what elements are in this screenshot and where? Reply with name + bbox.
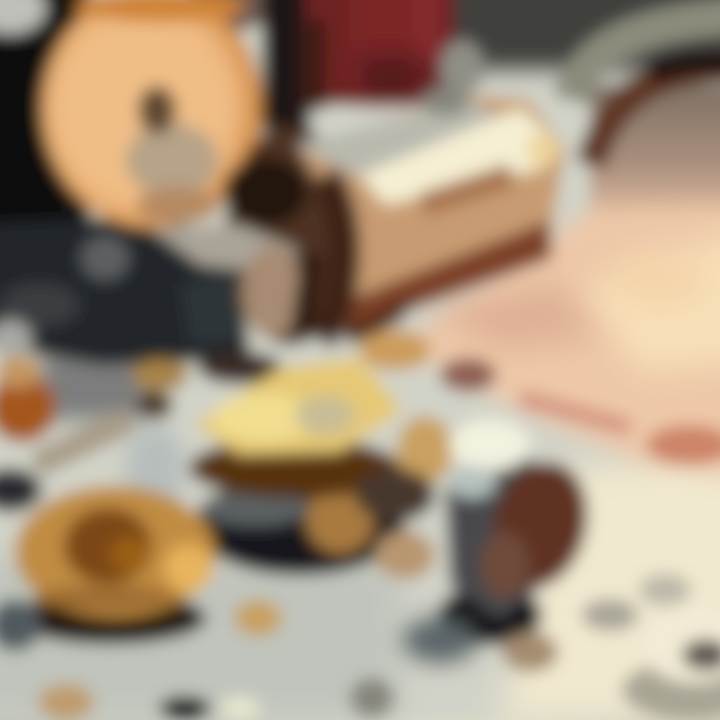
white dish bottom right <box>622 607 720 720</box>
tape roll <box>402 419 601 672</box>
cream box <box>225 40 565 345</box>
grey utensil on the left <box>0 420 130 512</box>
sandwich stack <box>189 358 453 579</box>
small golden pieces <box>0 330 431 442</box>
pink tabletop cloth <box>400 205 720 480</box>
golden donut <box>0 486 215 651</box>
dark left column <box>0 0 310 365</box>
orange disc <box>42 0 262 228</box>
dark roll <box>150 158 345 345</box>
curved dark handle top right <box>570 15 720 165</box>
red book <box>300 0 455 110</box>
scattered crumbs and coins <box>38 574 691 720</box>
